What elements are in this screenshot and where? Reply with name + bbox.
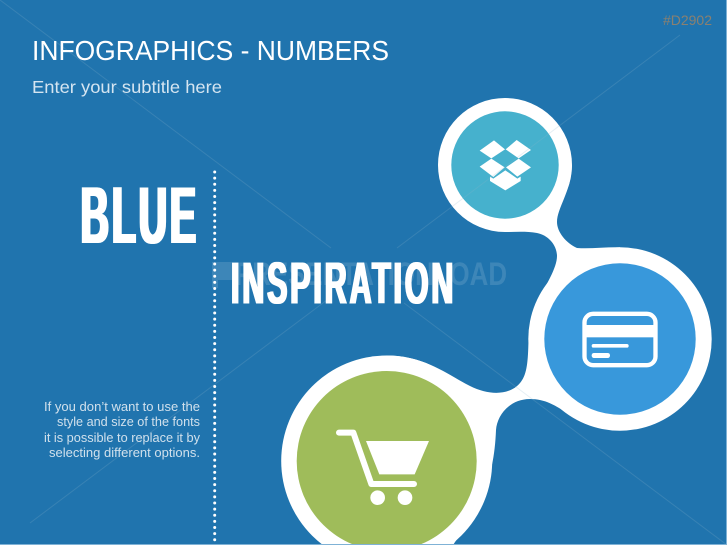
description text: If you don’t want to use the xyxy=(44,400,200,414)
watermark: PRESENTATIONLOAD xyxy=(235,256,507,292)
document code: #D2902 xyxy=(663,12,712,28)
title: INFOGRAPHICS - NUMBERS xyxy=(32,35,389,66)
circle: shopping cart xyxy=(297,371,477,545)
circle: credit card xyxy=(544,263,696,415)
icon: credit card xyxy=(584,314,656,365)
description text: selecting different options. xyxy=(49,446,200,460)
heading: blue: BLUE xyxy=(81,170,199,261)
description text: it is possible to replace it by xyxy=(44,431,201,445)
description text xyxy=(44,400,201,460)
description text: style and size of the fonts xyxy=(57,415,200,429)
white connected circles xyxy=(281,98,712,545)
dotted divider xyxy=(213,172,216,545)
icon: dropbox xyxy=(480,140,531,190)
heading: inspiration: INSPIRATION xyxy=(231,251,456,316)
subtitle: Enter your subtitle here xyxy=(32,77,222,97)
circle: dropbox xyxy=(451,111,559,219)
icon: shopping cart xyxy=(339,433,429,505)
